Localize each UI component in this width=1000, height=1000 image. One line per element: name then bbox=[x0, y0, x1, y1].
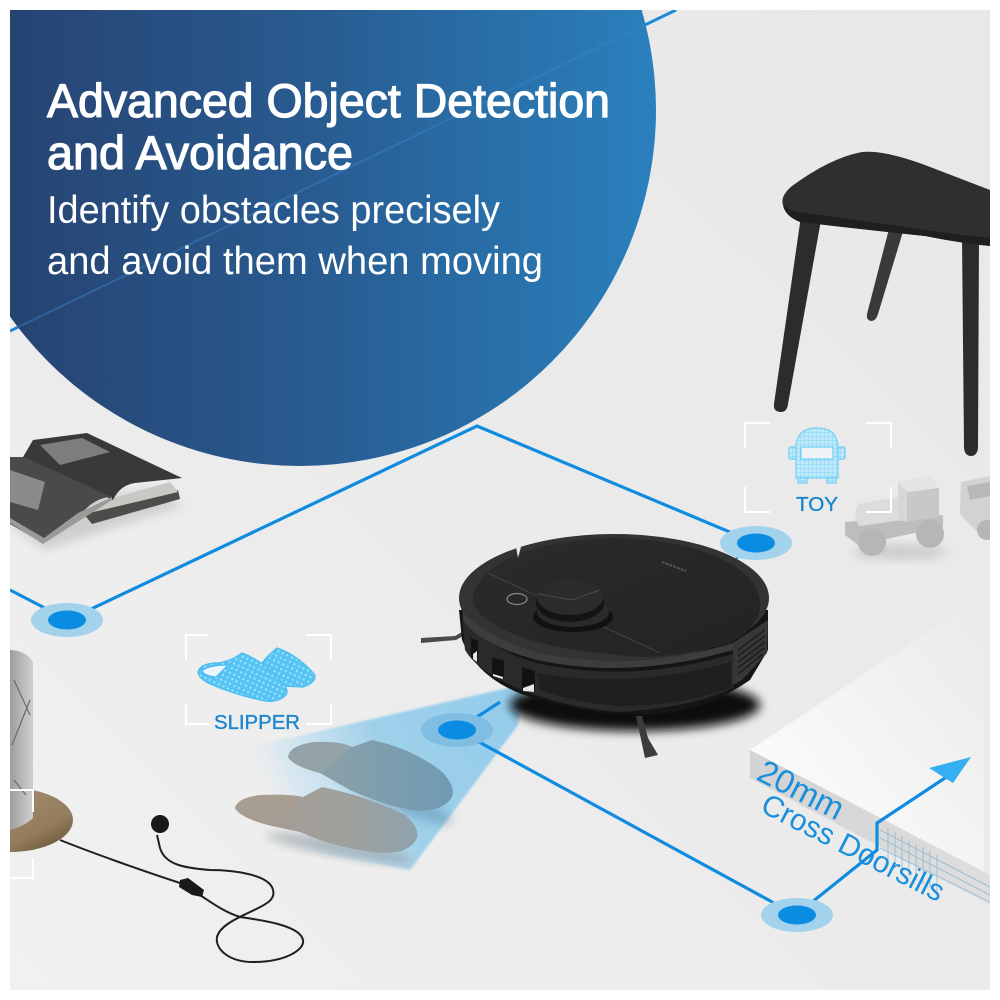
slab side bbox=[750, 750, 990, 905]
slab: doorsill bbox=[750, 679, 990, 905]
plug bbox=[151, 815, 169, 833]
toy detection frame bbox=[745, 423, 891, 516]
toy truck bbox=[845, 476, 948, 559]
robot shadow bbox=[510, 679, 760, 731]
dark blue disc bbox=[0, 0, 656, 466]
sensor window bbox=[522, 667, 535, 692]
sensor window bbox=[471, 638, 478, 663]
faint line over disc bbox=[10, 10, 676, 331]
wheel bbox=[916, 527, 944, 548]
slipper: front bbox=[235, 787, 418, 869]
sensor window bbox=[492, 657, 504, 679]
robot rim bbox=[459, 534, 769, 662]
blue circuit line behind disc bbox=[10, 10, 676, 331]
title: Advanced Object Detection bbox=[47, 74, 610, 127]
robot bumper bbox=[462, 618, 733, 712]
marble lamp column bbox=[10, 650, 33, 830]
magazines bbox=[10, 433, 185, 550]
slab top bbox=[750, 679, 984, 872]
doorsill label: 20mm bbox=[752, 752, 851, 827]
lidar turret bbox=[533, 610, 613, 632]
robot vent grille bbox=[733, 620, 768, 685]
inline switch bbox=[179, 878, 204, 897]
doorsill label: Cross Doorsills bbox=[756, 788, 950, 908]
side brush left bbox=[421, 632, 463, 643]
slipper: back bbox=[288, 740, 457, 833]
slipper detection frame bbox=[186, 635, 331, 734]
subtitle: and avoid them when moving bbox=[47, 240, 543, 283]
arrow head bbox=[929, 757, 971, 783]
power button bbox=[507, 594, 527, 604]
chair bbox=[774, 152, 990, 456]
route lines bbox=[10, 426, 948, 915]
icon: toy truck mesh bbox=[789, 428, 845, 483]
lamp detection bracket bbox=[10, 790, 33, 878]
robot vacuum bbox=[421, 534, 769, 758]
node: doorsill bbox=[761, 898, 833, 932]
slipper label: SLIPPER bbox=[214, 712, 300, 734]
lamp base bbox=[10, 790, 73, 852]
node: slipper bbox=[421, 713, 493, 747]
icon: slipper mesh bbox=[198, 648, 315, 701]
toy label: TOY bbox=[796, 494, 838, 516]
brand mark bbox=[662, 562, 686, 571]
sensor beam bbox=[250, 684, 525, 870]
side brush front bbox=[636, 716, 658, 758]
power cord bbox=[60, 815, 303, 962]
robot front panel bbox=[537, 662, 731, 706]
node: magazine bbox=[31, 603, 103, 637]
toy trailer bbox=[960, 476, 990, 540]
robot lower body bbox=[459, 610, 768, 715]
title bbox=[46, 82, 608, 170]
title: and Avoidance bbox=[47, 126, 353, 179]
subtitle bbox=[47, 189, 543, 283]
wheel bbox=[858, 539, 886, 556]
robot top plate bbox=[473, 538, 760, 657]
subtitle: Identify obstacles precisely bbox=[47, 189, 500, 232]
node: toy bbox=[720, 526, 792, 560]
